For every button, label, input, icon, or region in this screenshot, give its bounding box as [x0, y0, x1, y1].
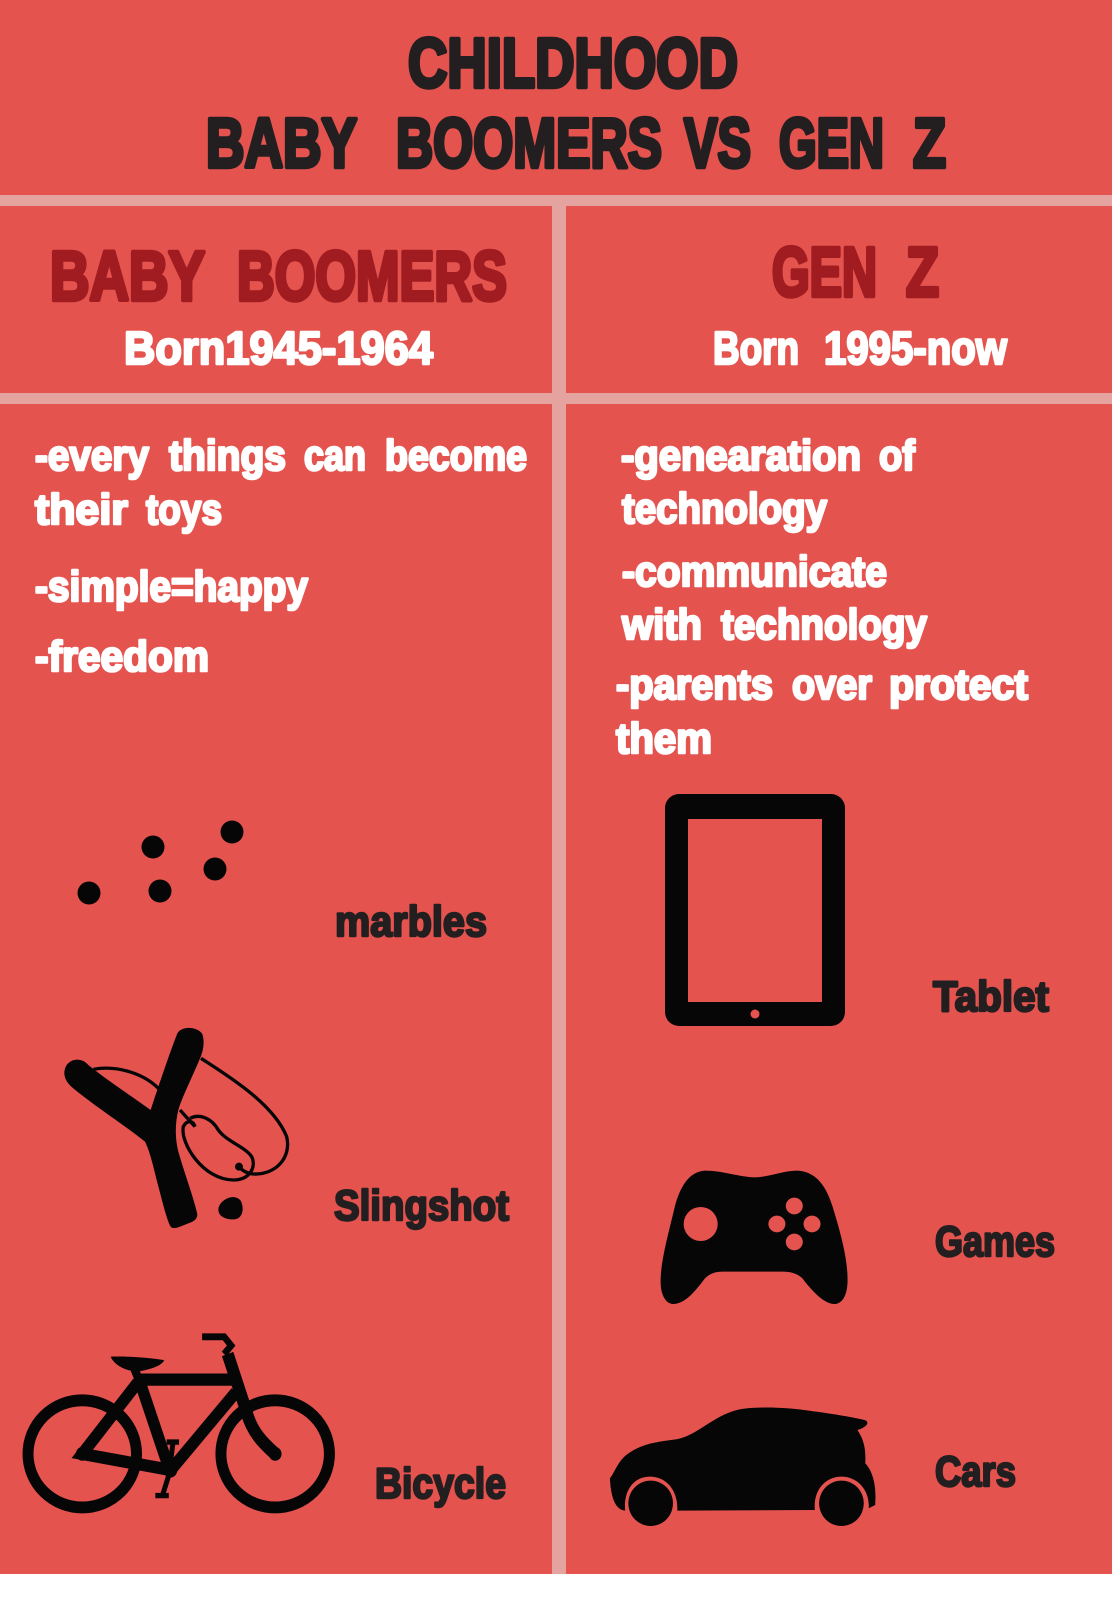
title: BABY: [206, 104, 357, 182]
text block: gen z traits: protect: [889, 661, 1028, 709]
text block: gen z traits: technology: [622, 485, 827, 533]
text block: gen z traits: [616, 432, 1028, 763]
label: cars: Cars: [935, 1448, 1016, 1496]
panel: baby boomers: [28, 237, 527, 1508]
label: tablet: Tablet: [933, 973, 1049, 1021]
title: BOOMERS: [396, 104, 662, 182]
title: GEN: [779, 104, 884, 182]
text block: baby boomers traits: -simple=happy: [35, 563, 308, 611]
icon: bicycle: [28, 1337, 329, 1507]
text block: baby boomers traits: [35, 432, 527, 681]
birth years: gen z: Born: [713, 322, 799, 374]
title: CHILDHOOD: [408, 24, 738, 102]
birth years: gen z: 1995-now: [824, 322, 1007, 374]
text block: gen z traits: with: [621, 601, 702, 649]
text block: gen z traits: of: [879, 432, 916, 480]
heading: baby boomers: [50, 237, 507, 315]
icon: tablet: [665, 794, 845, 1026]
icon: marbles: [78, 820, 244, 904]
text block: gen z traits: -genearation: [621, 432, 861, 480]
text block: baby boomers traits: -freedom: [35, 633, 209, 681]
label: slingshot: Slingshot: [334, 1182, 509, 1230]
icon: car: [610, 1408, 875, 1526]
text block: baby boomers traits: become: [385, 432, 527, 480]
panel: gen z: [610, 233, 1055, 1526]
label: games: Games: [935, 1218, 1055, 1266]
label: marbles: marbles: [335, 898, 487, 946]
heading: gen z: GEN: [772, 233, 877, 311]
heading: gen z: Z: [906, 233, 939, 311]
title: VS: [684, 104, 751, 182]
text block: gen z traits: technology: [721, 601, 927, 649]
heading: baby boomers: BOOMERS: [237, 237, 507, 315]
label: bicycle: Bicycle: [375, 1460, 506, 1508]
title: Z: [913, 104, 946, 182]
text block: baby boomers traits: their: [35, 486, 128, 534]
heading: baby boomers: BABY: [50, 237, 205, 315]
birth years: gen z: [713, 322, 1007, 374]
text block: gen z traits: -communicate: [622, 548, 887, 596]
icon: game controller: [661, 1171, 848, 1304]
icon: slingshot: [64, 1028, 288, 1228]
text block: baby boomers traits: can: [304, 432, 366, 480]
title: [206, 24, 946, 182]
text block: baby boomers traits: toys: [146, 486, 222, 534]
text block: gen z traits: over: [792, 661, 872, 709]
birth years: baby boomers: Born1945-1964: [124, 322, 433, 374]
text block: baby boomers traits: -every: [35, 432, 149, 480]
text block: gen z traits: -parents: [616, 661, 773, 709]
text block: gen z traits: them: [616, 715, 712, 763]
text block: baby boomers traits: things: [169, 432, 286, 480]
